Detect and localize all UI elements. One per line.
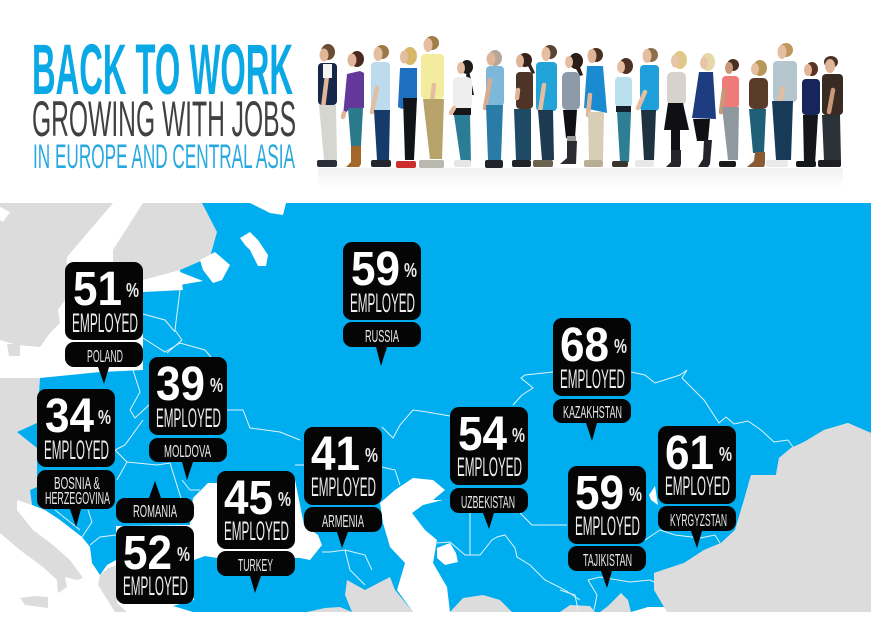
callout: Kyrgyzstan: % xyxy=(719,444,732,466)
text: EMPLOYED xyxy=(350,288,415,318)
callout: Poland: 51 xyxy=(73,263,122,316)
map xyxy=(0,203,871,612)
callout: Kazakhstan: KAZAKHSTAN xyxy=(563,402,622,422)
callout: Armenia: ARMENIA xyxy=(322,511,364,531)
map: grey land west xyxy=(0,203,217,612)
text: EMPLOYED xyxy=(560,364,625,394)
callout: Poland: % xyxy=(126,280,139,302)
callout: Uzbekistan: % xyxy=(512,425,525,447)
callout: Poland: POLAND xyxy=(87,346,123,366)
callout: Kyrgyzstan: KYRGYZSTAN xyxy=(670,510,727,530)
callout: Kazakhstan: 68 xyxy=(560,319,609,372)
photo: line of people xyxy=(317,36,843,188)
callout: Kyrgyzstan xyxy=(658,426,736,548)
callout: Turkey: TURKEY xyxy=(238,555,273,575)
callout: Tajikistan: % xyxy=(629,484,642,506)
callout: Romania: ROMANIA xyxy=(133,501,177,521)
callout: Moldova: % xyxy=(210,375,223,397)
callout: Tajikistan: TAJIKISTAN xyxy=(583,550,632,570)
callout: Uzbekistan xyxy=(450,407,528,529)
callout: Bosnia and Herzegovina: HERZEGOVINA xyxy=(45,488,110,508)
text: EMPLOYED xyxy=(156,403,221,433)
callout: Bosnia and Herzegovina: % xyxy=(98,407,111,429)
callout: Bosnia and Herzegovina: BOSNIA & xyxy=(54,473,100,493)
text: EMPLOYED xyxy=(457,452,522,482)
text: EMPLOYED xyxy=(665,471,730,501)
callout: Armenia: % xyxy=(365,445,378,467)
callout: Armenia xyxy=(304,427,382,548)
text: EMPLOYED xyxy=(72,308,138,338)
callout: Moldova xyxy=(149,357,227,480)
callout: Bosnia and Herzegovina: 34 xyxy=(45,390,94,443)
map: seas and lakes xyxy=(0,203,658,612)
callout: Uzbekistan: 54 xyxy=(458,408,507,461)
text: EMPLOYED xyxy=(44,435,109,465)
title xyxy=(32,31,296,176)
callout: Russia: RUSSIA xyxy=(365,326,399,346)
callout: Russia xyxy=(343,242,421,366)
callout: Turkey xyxy=(217,471,295,593)
callout: Moldova: MOLDOVA xyxy=(164,441,211,461)
text: EMPLOYED xyxy=(311,472,376,502)
text: BACK TO WORK xyxy=(32,31,293,110)
text: EMPLOYED xyxy=(575,511,640,541)
callout: Tajikistan: 59 xyxy=(575,467,624,520)
map: blue region xyxy=(17,203,871,612)
text: GROWING WITH JOBS xyxy=(32,91,296,147)
map: country borders xyxy=(55,290,793,610)
callout: Romania: 52 xyxy=(123,527,172,580)
text: EMPLOYED xyxy=(123,571,188,601)
callout: Armenia: 41 xyxy=(311,428,360,481)
callout: Russia: 59 xyxy=(351,243,400,296)
callout: Uzbekistan: UZBEKISTAN xyxy=(461,492,515,512)
callout: Poland xyxy=(65,262,143,384)
text: EMPLOYED xyxy=(224,516,289,546)
heading: region: IN EUROPE AND CENTRAL ASIA xyxy=(33,138,295,176)
callout: Russia: % xyxy=(404,260,417,282)
map: grey land south and east xyxy=(307,423,871,612)
callout: Kazakhstan xyxy=(553,318,631,441)
callout: Moldova: 39 xyxy=(156,358,205,411)
callout: Turkey: % xyxy=(278,489,291,511)
callout: Turkey: 45 xyxy=(224,472,273,525)
callout: Kyrgyzstan: 61 xyxy=(665,427,714,480)
callout: Romania: % xyxy=(177,544,190,566)
callout: Bosnia and Herzegovina xyxy=(37,389,115,527)
callout: Tajikistan xyxy=(568,466,646,588)
callout: Kazakhstan: % xyxy=(614,336,627,358)
callout: Romania xyxy=(116,481,194,604)
